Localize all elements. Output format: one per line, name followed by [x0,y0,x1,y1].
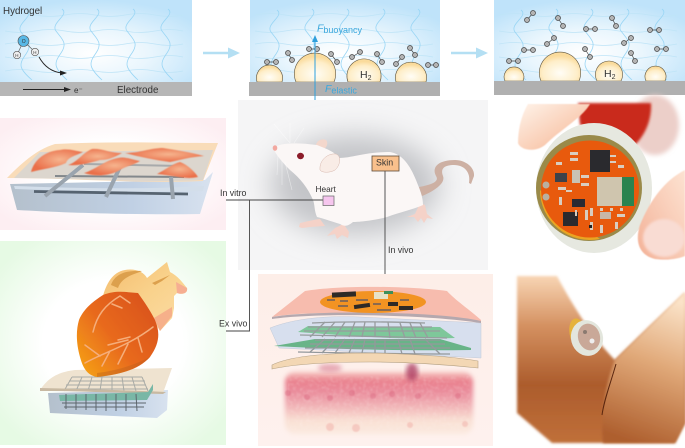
label: Hydrogel: Hydrogel [3,6,42,17]
arrow: force double-headed [312,35,318,108]
label: Skin: Skin [376,158,393,168]
pink encapsulation [272,287,481,323]
lower mesh [298,339,450,354]
icon: mouse nose [273,145,277,151]
device ring [536,123,652,253]
flexible circuit ellipse [320,291,426,313]
panel: in vivo skin-mounted device [258,274,493,446]
tan adhesive film [272,353,478,369]
label: H2: 2 [612,74,616,81]
skin tissue [285,363,473,434]
arrow: step 2 to 3 [451,48,488,58]
panel: bubble release [494,0,685,95]
box: heart location [323,196,334,206]
label: F buoyancy: buoyancy [323,25,362,35]
patch film [40,368,172,393]
electrode grid [34,164,188,199]
hydrogen molecules [506,10,668,64]
label: F buoyancy: F [317,22,324,34]
red background shape [578,103,651,145]
electrode bar [249,82,440,96]
cardiomyocytes [31,148,204,178]
label: H2: H [360,69,368,81]
icon: mouse ear back [316,139,327,149]
upper mesh [300,322,447,338]
patch block [48,390,168,418]
electrode mesh [64,377,148,391]
hydrogel block front [10,172,213,214]
block top seen through film [14,150,213,181]
mouse shadow [270,135,440,235]
icon: heart vessels [77,262,187,377]
icon: water molecule: H [15,53,19,58]
device on skin [566,316,607,360]
label: H2: 2 [368,75,372,82]
green layer [59,384,153,401]
bubbles [504,52,666,81]
arrow: proton path [39,57,67,76]
label: In vivo: In vivo [388,245,414,255]
forearm highlight [602,292,685,443]
panel: mouse model [219,100,488,331]
upper green layer [298,326,455,339]
label: Ex vivo: Ex vivo [219,318,247,328]
label: F elastic: elastic [331,86,357,96]
label: H2: H [604,68,612,80]
film base [7,142,218,182]
label: electron: e⁻ [74,86,83,95]
icon: mouse ear [320,154,340,172]
panel: water molecule reduction at electrode [0,0,192,96]
box: skin location [372,156,399,171]
icon: water molecule: H [33,50,37,55]
label: Electrode: Electrode [117,85,159,96]
photo: device on arm [517,276,685,443]
orange rim [540,190,600,240]
coronary arteries [85,296,153,366]
icon: water molecule: O [22,39,26,45]
icon: mouse feet [299,203,433,239]
icon: mouse tail [419,160,474,196]
icon: mouse body [273,143,423,226]
top finger [518,104,590,150]
arrow: step 1 to 2 [203,48,240,58]
connector lines [226,171,385,331]
icon: water molecule [13,36,39,59]
arm [517,276,685,443]
right thumb [638,170,685,260]
electrode bar [494,81,685,95]
dark rim [536,135,642,241]
hydrogen molecules [264,46,438,68]
soft shadow [631,95,679,155]
label: In vitro: In vitro [220,188,247,198]
bubbles [256,53,427,82]
whiskers [274,123,304,190]
panel: in vitro cardiomyocytes on device [0,118,226,230]
label: Heart: Heart [316,184,336,194]
translucent film edge [40,388,166,394]
heart ventricle [77,292,158,377]
hydrogel block [270,317,481,358]
icon: mouse eye [297,153,304,159]
lower mesh [62,394,146,411]
photo: circuit held between fingers [518,95,685,260]
arrow: electron flow [23,87,71,92]
panel: ex vivo heart on device [0,241,226,445]
panel: bubble growth with forces [249,0,440,108]
lower green layer [274,339,471,350]
elbow crease [602,364,616,415]
label: F elastic: F [325,83,332,95]
electrode bar [0,82,192,96]
pcb [541,140,639,238]
